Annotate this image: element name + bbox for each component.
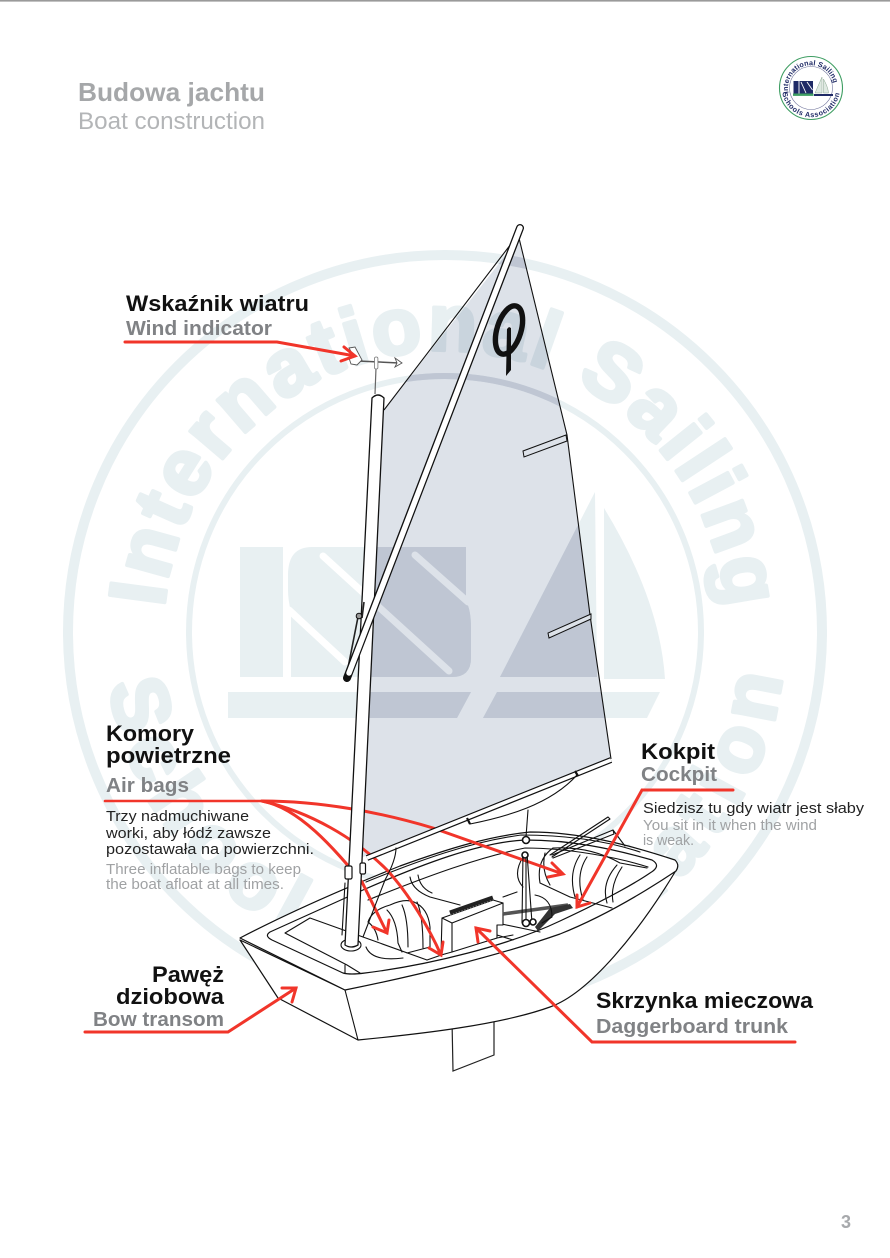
daggerboard trunk — [441, 898, 503, 955]
red leader: bow transom — [85, 988, 296, 1032]
boom — [367, 760, 611, 858]
mainsheet horse — [503, 895, 573, 931]
label: bow transom: dziobowa — [116, 984, 225, 1009]
air bag: stern — [518, 848, 647, 908]
label: air bags: Komory — [106, 721, 195, 746]
ropes — [342, 848, 403, 959]
label: wind indicator — [126, 291, 309, 340]
label: air bags: powietrzne — [106, 743, 231, 768]
wind indicator — [349, 347, 402, 394]
sail battens — [523, 435, 591, 638]
floor lines — [427, 892, 540, 960]
sail — [363, 239, 612, 857]
daggerboard — [452, 1015, 494, 1071]
watermark: ISSA emblem — [63, 250, 827, 988]
label: air bags: Three inflatable bags to keep — [106, 862, 301, 878]
tiller and rudder — [550, 817, 625, 858]
label: air bags: pozostawała na powierzchni. — [106, 841, 314, 858]
label: cockpit — [641, 739, 865, 849]
watermark: ISSA emblem: Schools Association — [110, 674, 784, 920]
label: cockpit: is weak. — [643, 833, 694, 849]
label: daggerboard trunk: Skrzynka mieczowa — [596, 988, 813, 1013]
heading: Budowa jachtu — [78, 77, 265, 107]
logo: International Sailing Schools Association — [778, 56, 844, 120]
logo: International Sailing Schools Association: Schools Association — [782, 92, 840, 118]
red leader: cockpit — [577, 790, 733, 907]
red leader: daggerboard trunk — [476, 928, 795, 1042]
label: cockpit: Siedzisz tu gdy wiatr jest słaby — [643, 800, 865, 817]
label: wind indicator: Wskaźnik wiatru — [126, 291, 309, 316]
hull — [240, 832, 678, 1040]
label: air bags: Air bags — [106, 775, 189, 797]
label: air bags — [105, 721, 314, 893]
label: air bags: Trzy nadmuchiwane — [106, 808, 249, 825]
label: cockpit: Kokpit — [641, 739, 716, 764]
label: air bags: the boat afloat at all times. — [106, 877, 284, 893]
label: bow transom — [93, 962, 225, 1031]
deck — [240, 832, 678, 990]
watermark: ISSA emblem: International Sailing — [108, 304, 770, 605]
heading: Boat construction — [78, 108, 265, 135]
sail number symbol — [490, 303, 528, 376]
page number: 3 — [841, 1212, 851, 1232]
label: bow transom: Pawęż — [152, 962, 224, 987]
label: daggerboard trunk: Daggerboard trunk — [596, 1016, 789, 1038]
mast — [341, 395, 384, 951]
top rule — [0, 0, 890, 2]
label: wind indicator: Wind indicator — [126, 318, 272, 340]
label: air bags: worki, aby łódź zawsze — [105, 825, 271, 842]
label: daggerboard trunk — [596, 988, 813, 1038]
heading — [78, 77, 265, 135]
label: bow transom: Bow transom — [93, 1009, 224, 1031]
air bag: bow — [368, 901, 430, 953]
label: cockpit: Cockpit — [641, 764, 717, 786]
logo: International Sailing Schools Association: International Sailing — [783, 60, 837, 94]
label: cockpit: You sit in it when the wind — [643, 818, 817, 834]
mainsheet — [522, 810, 536, 926]
foredeck — [285, 918, 427, 973]
red leader: air bags — [105, 801, 563, 955]
sprit — [346, 228, 520, 678]
cockpit rim — [267, 840, 657, 974]
red leader: wind indicator — [125, 342, 355, 361]
